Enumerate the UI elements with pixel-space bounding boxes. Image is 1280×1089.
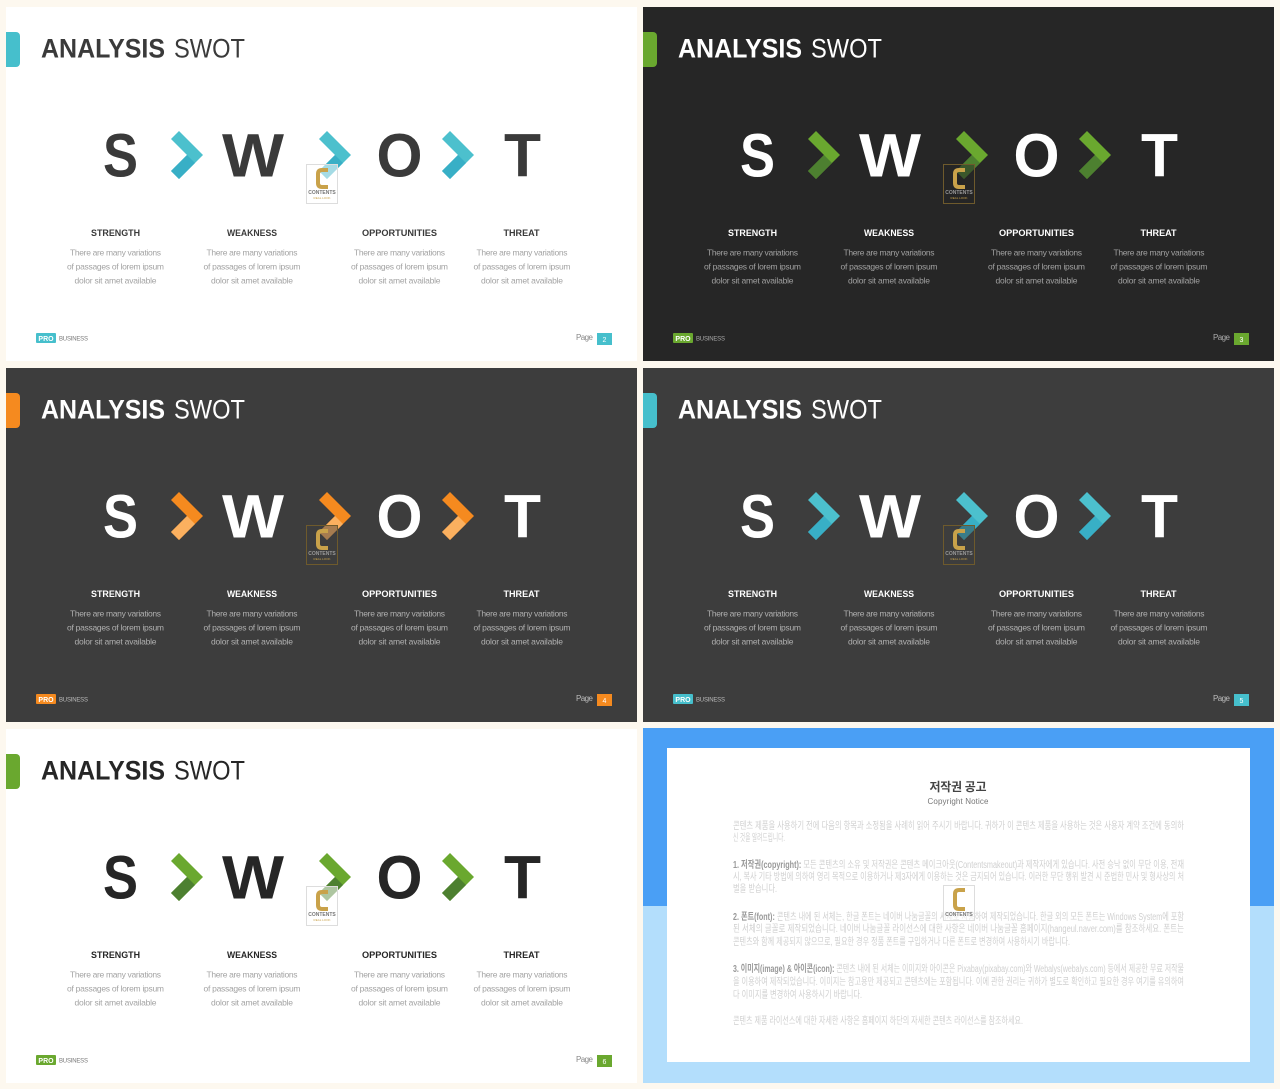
- column text: strength, weakness, opportunities, threat: There are many variations: [476, 970, 568, 980]
- arrows: [171, 131, 474, 179]
- footer: [36, 694, 612, 706]
- watermark logo: [944, 886, 974, 920]
- column text: strength, weakness, opportunities, threat: There are many variations: [707, 608, 798, 618]
- tab marker: [643, 393, 657, 428]
- footer: BUSINESS: [59, 1058, 88, 1064]
- column text: strength, weakness, opportunities, threat: There are many variations: [206, 608, 298, 618]
- footer: PRO: [675, 336, 691, 343]
- column text: strength, weakness, opportunities, threat: There are many variations: [476, 608, 568, 618]
- footer: Page: [1213, 694, 1231, 703]
- footer: PRO: [38, 1058, 54, 1065]
- notice heading: Copyright Notice: [928, 797, 989, 806]
- notice body text: 콘텐츠와 함께 제공되지 않으므로, 필요한 경우 정품 폰트를 구입하거나 다른 폰트로 변경하여 사용하시기 바랍니다.: [733, 935, 1070, 948]
- panel: slide 3 black green: [643, 7, 1274, 361]
- column text: strength, weakness, opportunities, threat: There are many variations: [70, 248, 161, 258]
- column text: strength, weakness, opportunities, threat: OPPORTUNITIES: [362, 950, 437, 960]
- column text: strength, weakness, opportunities, threat: dolor sit amet available: [996, 276, 1078, 286]
- column text: strength, weakness, opportunities, threat: of passages of lorem ipsum: [704, 622, 801, 632]
- column text: strength, weakness, opportunities, threat: of passages of lorem ipsum: [351, 262, 448, 272]
- column text: strength, weakness, opportunities, threat: dolor sit amet available: [481, 636, 563, 646]
- panel: copyright notice: [643, 728, 1274, 1083]
- panel: slide 2 white cyan: [6, 7, 637, 361]
- column text: strength, weakness, opportunities, threat: WEAKNESS: [227, 589, 277, 599]
- column text: strength, weakness, opportunities, threat: There are many variations: [206, 248, 298, 258]
- SWOT letters: T: [504, 482, 541, 550]
- column text: strength, weakness, opportunities, threat: of passages of lorem ipsum: [474, 622, 570, 632]
- footer: BUSINESS: [59, 336, 88, 342]
- watermark logo: [306, 526, 338, 564]
- watermark logo: REAL LOOK: [314, 557, 330, 561]
- SWOT letters: S: [103, 844, 138, 912]
- column text: strength, weakness, opportunities, threat: STRENGTH: [728, 589, 777, 599]
- footer: PRO: [38, 697, 54, 704]
- watermark logo: [944, 526, 974, 564]
- column text: strength, weakness, opportunities, threat: There are many variations: [70, 608, 161, 618]
- column text: strength, weakness, opportunities, threat: There are many variations: [844, 248, 934, 258]
- arrows: [808, 492, 1111, 540]
- tab marker: [6, 754, 20, 789]
- SWOT letters: [103, 122, 541, 190]
- column text: strength, weakness, opportunities, threat: dolor sit amet available: [1118, 276, 1200, 286]
- column text: strength, weakness, opportunities, threat: of passages of lorem ipsum: [840, 622, 938, 632]
- column text: strength, weakness, opportunities, threat: of passages of lorem ipsum: [67, 622, 164, 632]
- column text: strength, weakness, opportunities, threat: There are many variations: [991, 608, 1082, 618]
- notice body text: [733, 819, 1184, 1027]
- column text: strength, weakness, opportunities, threat: of passages of lorem ipsum: [204, 622, 300, 632]
- footer: PRO: [675, 697, 691, 704]
- column text: strength, weakness, opportunities, threat: WEAKNESS: [864, 228, 914, 238]
- column text: strength, weakness, opportunities, threat: of passages of lorem ipsum: [67, 984, 164, 994]
- column text: strength, weakness, opportunities, threat: There are many variations: [354, 248, 445, 258]
- SWOT letters: W: [222, 482, 284, 550]
- tab marker: [6, 393, 20, 428]
- column text: strength, weakness, opportunities, threat: [67, 589, 570, 646]
- SWOT letters: W: [859, 482, 921, 550]
- title: ANALYSIS: [678, 34, 802, 64]
- column text: strength, weakness, opportunities, threat: of passages of lorem ipsum: [67, 262, 164, 272]
- footer: BUSINESS: [696, 336, 725, 342]
- watermark logo: [306, 886, 338, 926]
- SWOT letters: S: [740, 122, 775, 190]
- column text: strength, weakness, opportunities, threat: THREAT: [1140, 589, 1177, 599]
- column text: strength, weakness, opportunities, threat: There are many variations: [1114, 248, 1204, 258]
- watermark logo: [306, 164, 338, 204]
- watermark logo: CONTENTS: [945, 551, 973, 557]
- notice body text: 다 이미지를 변경하여 사용하시기 바랍니다.: [733, 988, 862, 1001]
- arrows: [171, 853, 474, 901]
- column text: strength, weakness, opportunities, threat: There are many variations: [707, 248, 798, 258]
- column text: strength, weakness, opportunities, threat: There are many variations: [1114, 608, 1204, 618]
- column text: strength, weakness, opportunities, threat: There are many variations: [476, 248, 568, 258]
- footer: [36, 1055, 612, 1067]
- SWOT letters: O: [376, 122, 422, 190]
- column text: strength, weakness, opportunities, threat: There are many variations: [844, 608, 934, 618]
- tab marker: [6, 32, 20, 67]
- title: ANALYSIS: [41, 394, 165, 424]
- watermark logo: CONTENTS: [308, 912, 336, 918]
- column text: strength, weakness, opportunities, threat: of passages of lorem ipsum: [474, 984, 570, 994]
- column text: strength, weakness, opportunities, threat: of passages of lorem ipsum: [1110, 622, 1208, 632]
- SWOT letters: [103, 844, 541, 912]
- footer: PRO: [38, 336, 54, 343]
- notice body text: 벌을 받습니다.: [733, 883, 777, 895]
- column text: strength, weakness, opportunities, threat: of passages of lorem ipsum: [840, 262, 938, 272]
- column text: strength, weakness, opportunities, threat: dolor sit amet available: [996, 636, 1078, 646]
- column text: strength, weakness, opportunities, threat: dolor sit amet available: [74, 636, 157, 646]
- footer: [673, 333, 1249, 345]
- arrows: [171, 492, 474, 540]
- SWOT letters: O: [1014, 482, 1060, 550]
- footer: 2: [603, 337, 607, 344]
- SWOT letters: [740, 122, 1178, 190]
- column text: strength, weakness, opportunities, threat: of passages of lorem ipsum: [1110, 262, 1208, 272]
- column text: strength, weakness, opportunities, threat: There are many variations: [354, 608, 445, 618]
- SWOT letters: S: [740, 482, 775, 550]
- SWOT letters: S: [103, 122, 138, 190]
- column text: strength, weakness, opportunities, threat: [67, 228, 570, 286]
- panel: slide 5 grey cyan: [643, 368, 1274, 722]
- column text: strength, weakness, opportunities, threat: OPPORTUNITIES: [362, 589, 437, 599]
- column text: strength, weakness, opportunities, threat: STRENGTH: [91, 589, 140, 599]
- column text: strength, weakness, opportunities, threat: [704, 228, 1208, 286]
- column text: strength, weakness, opportunities, threat: THREAT: [504, 950, 540, 960]
- column text: strength, weakness, opportunities, threat: [704, 589, 1208, 646]
- column text: strength, weakness, opportunities, threat: dolor sit amet available: [712, 636, 794, 646]
- column text: strength, weakness, opportunities, threat: dolor sit amet available: [358, 636, 441, 646]
- column text: strength, weakness, opportunities, threat: dolor sit amet available: [712, 276, 794, 286]
- watermark logo: REAL LOOK: [314, 196, 330, 200]
- title: SWOT: [811, 394, 882, 424]
- watermark logo: REAL LOOK: [951, 196, 967, 200]
- SWOT letters: W: [222, 122, 284, 190]
- column text: strength, weakness, opportunities, threat: STRENGTH: [91, 228, 140, 238]
- column text: strength, weakness, opportunities, threat: THREAT: [504, 228, 540, 238]
- footer: [673, 694, 1249, 706]
- column text: strength, weakness, opportunities, threat: of passages of lorem ipsum: [704, 262, 801, 272]
- SWOT letters: [740, 482, 1178, 550]
- column text: strength, weakness, opportunities, threat: THREAT: [1140, 228, 1177, 238]
- footer: Page: [576, 333, 594, 342]
- column text: strength, weakness, opportunities, threat: of passages of lorem ipsum: [988, 262, 1085, 272]
- column text: strength, weakness, opportunities, threat: OPPORTUNITIES: [999, 589, 1074, 599]
- column text: strength, weakness, opportunities, threat: There are many variations: [70, 970, 161, 980]
- SWOT letters: O: [1014, 122, 1060, 190]
- title: SWOT: [811, 34, 882, 64]
- SWOT letters: T: [1141, 482, 1178, 550]
- footer: BUSINESS: [59, 698, 88, 704]
- watermark logo: REAL LOOK: [951, 557, 967, 561]
- title: SWOT: [174, 394, 245, 424]
- column text: strength, weakness, opportunities, threat: WEAKNESS: [227, 950, 277, 960]
- column text: strength, weakness, opportunities, threat: dolor sit amet available: [211, 636, 293, 646]
- column text: strength, weakness, opportunities, threat: of passages of lorem ipsum: [204, 262, 300, 272]
- column text: strength, weakness, opportunities, threat: dolor sit amet available: [358, 276, 441, 286]
- column text: strength, weakness, opportunities, threat: dolor sit amet available: [74, 998, 157, 1008]
- title: [41, 756, 245, 786]
- title: [41, 34, 245, 64]
- footer: 6: [603, 1059, 607, 1066]
- tab marker: [643, 32, 657, 67]
- column text: strength, weakness, opportunities, threat: of passages of lorem ipsum: [351, 984, 448, 994]
- panel: slide 4 grey orange: [6, 368, 637, 722]
- notice body text: 콘텐츠 제품 라이선스에 대한 자세한 사항은 홈페이지 하단의 자세한 콘텐츠 라이선스를 참조하세요.: [733, 1014, 1023, 1027]
- column text: strength, weakness, opportunities, threat: dolor sit amet available: [358, 998, 441, 1008]
- column text: strength, weakness, opportunities, threat: dolor sit amet available: [481, 276, 563, 286]
- title: [678, 34, 882, 64]
- title: ANALYSIS: [41, 756, 165, 786]
- footer: 4: [603, 698, 607, 705]
- column text: strength, weakness, opportunities, threat: OPPORTUNITIES: [999, 228, 1074, 238]
- title: [41, 394, 245, 424]
- column text: strength, weakness, opportunities, threat: dolor sit amet available: [1118, 636, 1200, 646]
- title: [678, 394, 882, 424]
- column text: strength, weakness, opportunities, threat: [67, 950, 570, 1008]
- SWOT letters: T: [504, 122, 541, 190]
- title: ANALYSIS: [678, 394, 802, 424]
- footer: Page: [576, 694, 594, 703]
- SWOT letters: T: [504, 844, 541, 912]
- SWOT letters: O: [376, 844, 422, 912]
- watermark logo: [944, 164, 974, 204]
- watermark logo: REAL LOOK: [314, 918, 330, 922]
- SWOT letters: [103, 482, 541, 550]
- column text: strength, weakness, opportunities, threat: of passages of lorem ipsum: [988, 622, 1085, 632]
- notice heading: [928, 779, 989, 806]
- column text: strength, weakness, opportunities, threat: dolor sit amet available: [74, 276, 157, 286]
- column text: strength, weakness, opportunities, threat: dolor sit amet available: [211, 276, 293, 286]
- column text: strength, weakness, opportunities, threat: THREAT: [504, 589, 540, 599]
- column text: strength, weakness, opportunities, threat: dolor sit amet available: [848, 636, 930, 646]
- SWOT letters: T: [1141, 122, 1178, 190]
- footer: 5: [1240, 698, 1244, 705]
- title: ANALYSIS: [41, 34, 165, 64]
- column text: strength, weakness, opportunities, threat: STRENGTH: [728, 228, 777, 238]
- title: SWOT: [174, 756, 245, 786]
- title: SWOT: [174, 34, 245, 64]
- column text: strength, weakness, opportunities, threat: There are many variations: [354, 970, 445, 980]
- watermark logo: CONTENTS: [308, 551, 336, 557]
- column text: strength, weakness, opportunities, threat: dolor sit amet available: [211, 998, 293, 1008]
- footer: 3: [1240, 337, 1244, 344]
- arrows: [808, 131, 1111, 179]
- footer: [36, 333, 612, 345]
- SWOT letters: W: [222, 844, 284, 912]
- column text: strength, weakness, opportunities, threat: WEAKNESS: [864, 589, 914, 599]
- SWOT letters: S: [103, 482, 138, 550]
- column text: strength, weakness, opportunities, threat: There are many variations: [206, 970, 298, 980]
- column text: strength, weakness, opportunities, threat: STRENGTH: [91, 950, 140, 960]
- column text: strength, weakness, opportunities, threat: There are many variations: [991, 248, 1082, 258]
- watermark logo: CONTENTS: [308, 190, 336, 196]
- panel: slide 6 white green: [6, 729, 637, 1083]
- SWOT letters: W: [859, 122, 921, 190]
- column text: strength, weakness, opportunities, threat: of passages of lorem ipsum: [474, 262, 570, 272]
- column text: strength, weakness, opportunities, threat: dolor sit amet available: [848, 276, 930, 286]
- footer: Page: [1213, 333, 1231, 342]
- notice heading: 저작권 공고: [930, 779, 986, 794]
- column text: strength, weakness, opportunities, threat: of passages of lorem ipsum: [351, 622, 448, 632]
- watermark logo: CONTENTS: [945, 912, 973, 918]
- column text: strength, weakness, opportunities, threat: WEAKNESS: [227, 228, 277, 238]
- footer: Page: [576, 1055, 594, 1064]
- footer: BUSINESS: [696, 698, 725, 704]
- column text: strength, weakness, opportunities, threat: dolor sit amet available: [481, 998, 563, 1008]
- notice body text: 신 것을 알려드립니다.: [733, 831, 785, 844]
- column text: strength, weakness, opportunities, threat: of passages of lorem ipsum: [204, 984, 300, 994]
- SWOT letters: O: [376, 482, 422, 550]
- column text: strength, weakness, opportunities, threat: OPPORTUNITIES: [362, 228, 437, 238]
- watermark logo: CONTENTS: [945, 190, 973, 196]
